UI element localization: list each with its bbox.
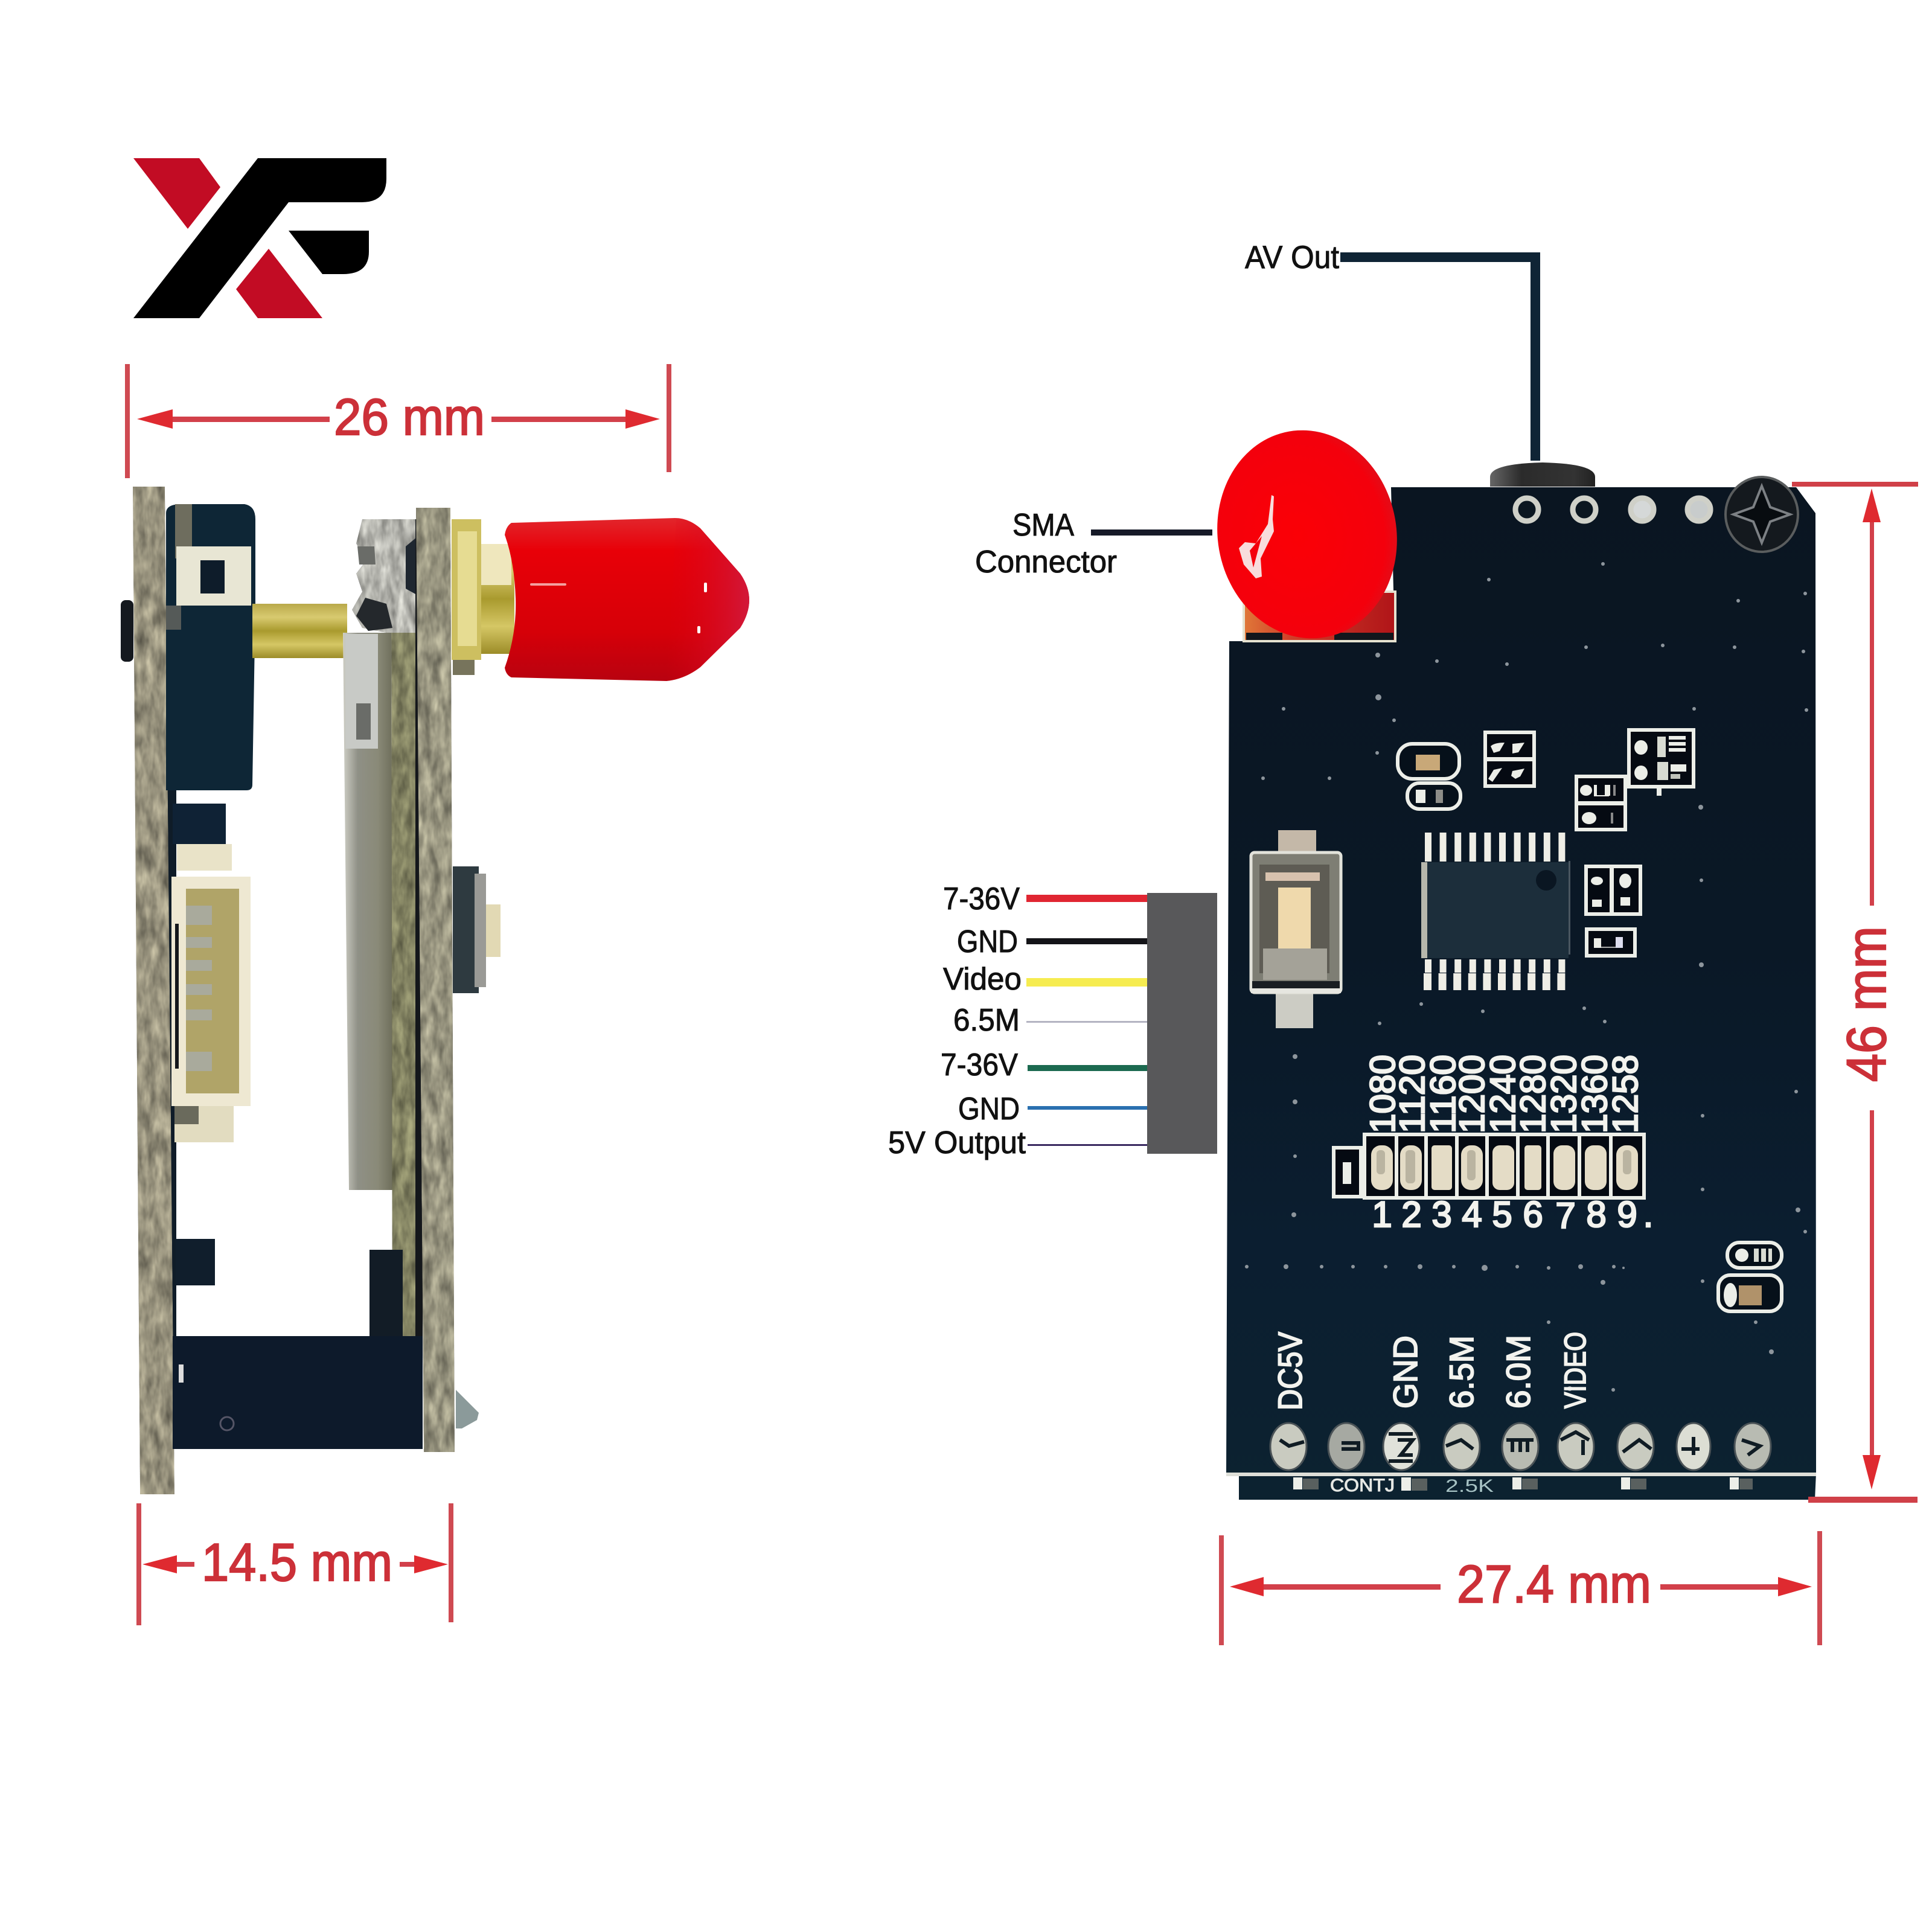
wire: 7-36V red: 7-36V (943, 881, 1020, 916)
right PCB edge (416, 508, 455, 1452)
solder blob (352, 519, 418, 633)
lower dark block (173, 1250, 423, 1449)
dimension: 27.4 mm width (1219, 1531, 1822, 1645)
label: SMA Connector with leader: Connector (975, 545, 1117, 580)
resolution silkscreen labels: 1160 (1424, 1055, 1463, 1133)
resolution silkscreen labels: 1258 (1606, 1055, 1645, 1133)
wire: GND black (957, 924, 1147, 959)
SMA barrel (481, 544, 514, 654)
LED index numbers: 1 (1372, 1194, 1392, 1235)
wire: 6.5M white (953, 1003, 1147, 1038)
through holes, top row (1515, 498, 1710, 521)
red SMA cap, front (1201, 416, 1413, 653)
screw tip (456, 1390, 479, 1428)
resolution silkscreen labels: 1320 (1544, 1055, 1584, 1133)
side view of the module (121, 487, 749, 1494)
label: SMA Connector with leader: SMA (1012, 508, 1074, 543)
pin function labels: 6.5M (1442, 1335, 1480, 1409)
LED index numbers: 5 (1492, 1194, 1512, 1235)
pin function labels: GND (1386, 1335, 1424, 1409)
resolution silkscreen labels: 1200 (1453, 1055, 1492, 1133)
dimension: 46 mm height: 46 mm (1836, 926, 1898, 1082)
dimension: 27.4 mm width: 27.4 mm (1457, 1554, 1651, 1614)
resolution silkscreen labels: 1360 (1575, 1055, 1614, 1133)
SMD pad box E (1587, 929, 1635, 956)
label: SMA Connector with leader (975, 508, 1212, 580)
wire: GND blue (958, 1092, 1147, 1127)
label: AV Out with leader (1245, 240, 1535, 461)
LED bank (1334, 1134, 1644, 1198)
SMA base pad (1244, 592, 1395, 641)
dimension: 14.5 mm depth: 14.5 mm (202, 1532, 392, 1592)
dimension: 26 mm width (125, 364, 671, 478)
metal shield (343, 633, 392, 1190)
pin function labels: 6.0M (1499, 1335, 1537, 1409)
wire: 6.5M white: 6.5M (953, 1003, 1020, 1038)
dimension: 26 mm width: 26 mm (334, 389, 485, 446)
solder pads row (1270, 1423, 1771, 1470)
wire: Video yellow (943, 962, 1147, 997)
LED index numbers (1372, 1194, 1653, 1236)
resolution silkscreen labels (1363, 1055, 1645, 1133)
AV jack, front (1490, 462, 1595, 487)
pin function labels: DC5V (1271, 1331, 1309, 1410)
bottom edge strip (1226, 1473, 1816, 1496)
label: AV Out with leader: AV Out (1245, 240, 1339, 275)
logo: XF brand mark (133, 158, 386, 318)
SMD pad box C (1576, 776, 1625, 830)
wire: 7-36V red (943, 881, 1147, 916)
resolution silkscreen labels: 1240 (1483, 1055, 1523, 1133)
wire: GND blue: GND (958, 1092, 1020, 1127)
SMD pad box D (1586, 866, 1640, 914)
dimension: 46 mm height (1792, 482, 1918, 1503)
bottom edge strip: CONTJ (1330, 1476, 1395, 1495)
wiring harness labels (888, 881, 1217, 1160)
dark strip along left PCB (165, 785, 176, 1449)
wire: 5V Output purple: 5V Output (888, 1125, 1026, 1160)
small SMD block (176, 1239, 215, 1285)
capacitor pair lower right (1718, 1243, 1782, 1311)
left PCB edge (133, 487, 174, 1494)
red antenna cap (505, 518, 749, 681)
gold coax pin (252, 604, 347, 658)
wire: 5V Output purple (888, 1125, 1147, 1160)
board specks (1245, 562, 1808, 1392)
dimension: 14.5 mm depth (136, 1503, 453, 1625)
bottom edge strip: 2.5K (1445, 1476, 1494, 1496)
capacitor pair upper left (1398, 744, 1460, 809)
LED index numbers: 3 (1431, 1194, 1452, 1235)
LED index numbers: 9 (1617, 1194, 1637, 1235)
connector body (1147, 893, 1217, 1154)
gold SMA flange (452, 519, 481, 660)
LED index numbers: . (1643, 1194, 1653, 1235)
side connector (171, 844, 251, 1142)
LED index numbers: 2 (1401, 1194, 1422, 1235)
wire: 7-36V green: 7-36V (941, 1048, 1018, 1083)
LED index numbers: 6 (1523, 1194, 1543, 1235)
LED index numbers: 8 (1586, 1194, 1607, 1235)
PCB front view (1201, 416, 1816, 1500)
tact switch (1251, 830, 1341, 1028)
LED index numbers: 4 (1462, 1194, 1482, 1235)
SMD pad box B (1629, 730, 1694, 796)
wire: GND black: GND (957, 924, 1018, 959)
mounting screw (1726, 477, 1798, 552)
tact button side (453, 866, 501, 993)
resolution silkscreen labels: 1280 (1514, 1055, 1553, 1133)
SMD pad box A (1485, 732, 1534, 786)
LED index numbers: 7 (1555, 1195, 1576, 1236)
resolution silkscreen labels: 1080 (1363, 1055, 1403, 1133)
main IC (1421, 847, 1570, 982)
inner PCB strip (391, 598, 418, 1389)
wire: Video yellow: Video (943, 962, 1022, 997)
pin function labels (1271, 1331, 1592, 1410)
AV jack, side (121, 504, 255, 790)
resolution silkscreen labels: 1120 (1393, 1055, 1432, 1133)
pin function labels: VIDEO (1558, 1332, 1592, 1409)
upper dark block (173, 804, 226, 844)
wire: 7-36V green (941, 1048, 1147, 1083)
